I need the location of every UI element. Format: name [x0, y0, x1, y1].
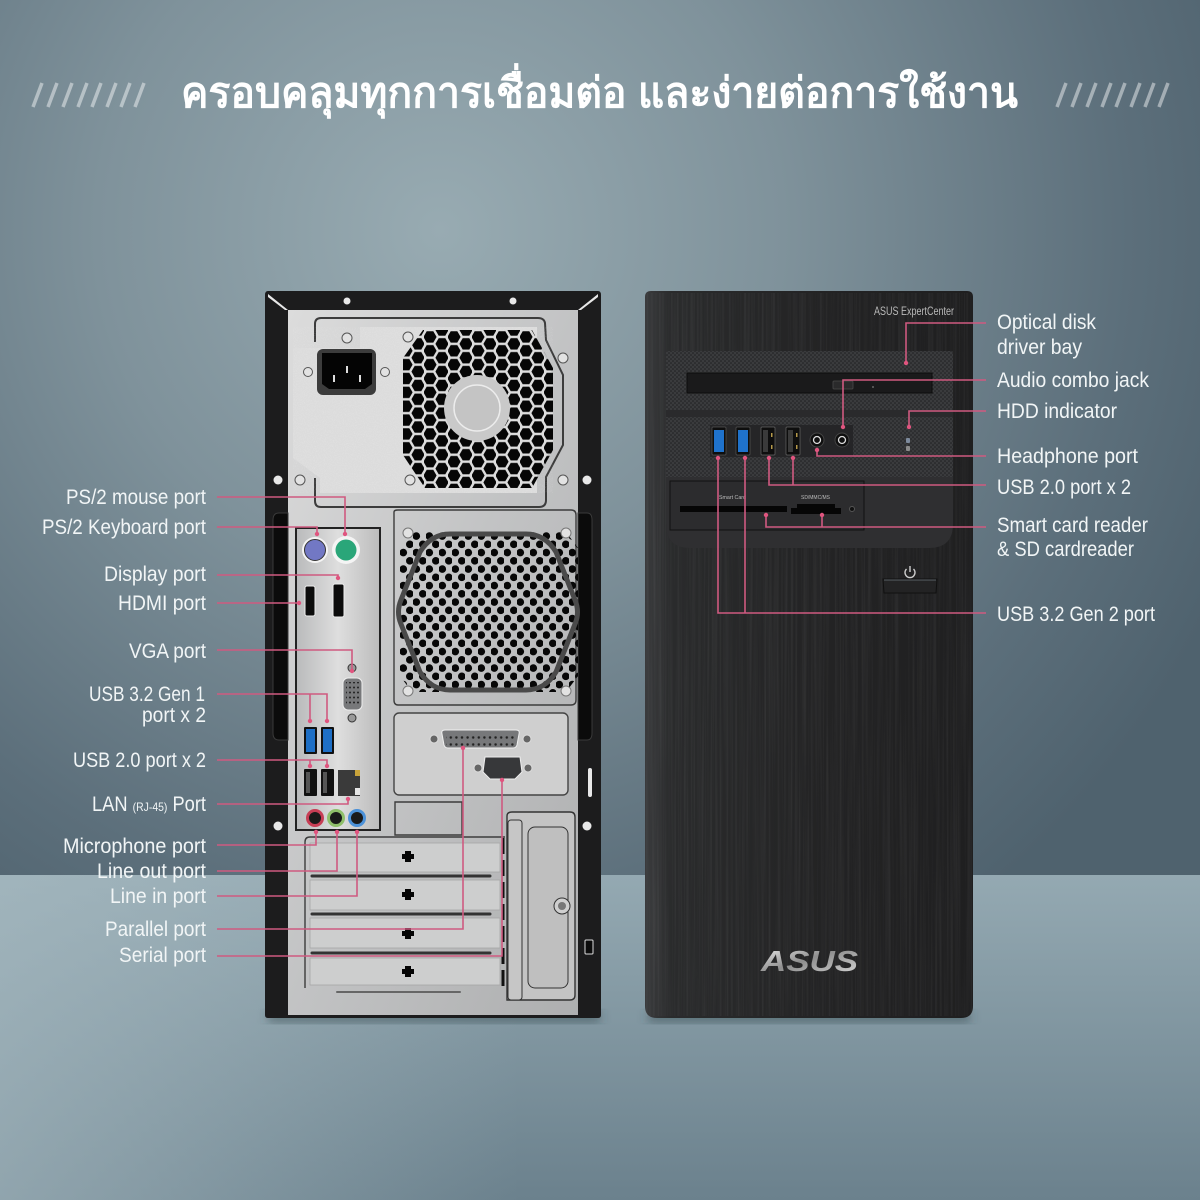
callout: Smart card reader and SD cardreader — [764, 513, 1148, 561]
panel: rear view of tower — [265, 291, 601, 1018]
slot slits — [312, 876, 490, 992]
callout: Serial port — [119, 778, 504, 967]
callout: Line out port: Line out port — [97, 860, 206, 883]
USB 3.2 ports — [304, 727, 334, 754]
tower body — [645, 291, 973, 1018]
IO shield — [296, 528, 380, 830]
callout: Display port: Display port — [104, 563, 206, 586]
audio jacks — [308, 810, 364, 826]
power supply — [293, 318, 568, 507]
PS/2 keyboard connector — [332, 536, 360, 564]
bezel band — [666, 410, 953, 417]
fan grille — [394, 510, 578, 705]
expansion slots — [305, 802, 575, 1000]
callout: Serial port: Serial port — [119, 944, 206, 967]
callout: USB 2.0 port x 2 (front) — [767, 456, 1131, 499]
callout: Audio combo jack: Audio combo jack — [997, 369, 1149, 392]
mesh lower — [666, 417, 953, 477]
psu outline — [315, 318, 563, 507]
optical drive — [687, 373, 932, 393]
callout: PS/2 Keyboard port — [42, 516, 319, 539]
DisplayPort connector — [333, 584, 344, 617]
callout: HDMI port — [118, 592, 301, 615]
callout: USB 3.2 Gen 1 port x 2: USB 3.2 Gen 1 — [89, 683, 205, 706]
callout: PS/2 Keyboard port: PS/2 Keyboard port — [42, 516, 206, 539]
callout: VGA port: VGA port — [129, 640, 206, 663]
card reader — [670, 481, 864, 530]
psu plate grain — [293, 327, 553, 493]
psu screws — [295, 332, 568, 485]
callout: HDD indicator — [907, 400, 1117, 429]
card reader: Smart Card — [719, 495, 746, 501]
retention bracket — [503, 812, 575, 1000]
ASUS logo: ASUS — [760, 946, 859, 978]
callout: Parallel port: Parallel port — [105, 918, 206, 941]
side cut-outs — [273, 513, 592, 740]
callout: LAN port: LAN (RJ-45) Port — [92, 793, 206, 816]
headphone jack — [810, 433, 824, 447]
legacy port panel — [394, 713, 568, 795]
callout: Line in port — [110, 830, 359, 908]
title: ครอบคลุมทุกการเชื่อมต่อ และง่ายต่อการใช้งาน — [181, 63, 1018, 119]
front bezel — [666, 351, 953, 548]
brushed texture — [646, 293, 972, 1016]
callout: Optical disk driver bay — [904, 311, 1096, 365]
callout: Optical disk driver bay: Optical disk — [997, 311, 1096, 334]
callout: Headphone port — [815, 445, 1138, 468]
callout: Microphone port — [63, 830, 318, 858]
front USB 3.2 ports — [712, 427, 750, 455]
callout: Optical disk driver bay: driver bay — [997, 336, 1082, 359]
USB 2.0 ports — [304, 769, 334, 796]
callout: VGA port — [129, 640, 354, 673]
callout: Line out port — [97, 830, 339, 883]
callout: USB 3.2 Gen 1 port x 2: port x 2 — [142, 704, 206, 727]
power socket — [317, 349, 376, 395]
callout: Headphone port: Headphone port — [997, 445, 1138, 468]
parallel connector — [430, 730, 531, 748]
decorative slashes left — [33, 83, 144, 107]
callout: Parallel port — [105, 746, 465, 941]
psu fan hub — [444, 375, 510, 441]
serial connector — [474, 757, 532, 779]
callout: HDMI port: HDMI port — [118, 592, 206, 615]
tower shadows — [268, 1010, 970, 1023]
psu hex vent — [403, 330, 553, 488]
chassis silver plate — [288, 310, 578, 1015]
background floor — [0, 875, 1200, 1200]
callout: Line in port: Line in port — [110, 885, 206, 908]
callout: USB 2.0 port x 2 (rear) — [73, 749, 329, 772]
callout: Smart card reader and SD cardreader: Smart card reader — [997, 514, 1148, 537]
callout: USB 3.2 Gen 2 port — [716, 456, 1155, 626]
chassis black frame — [265, 291, 601, 1018]
callout: LAN port — [92, 793, 350, 816]
callout: USB 3.2 Gen 2 port: USB 3.2 Gen 2 port — [997, 603, 1155, 626]
VGA connector — [343, 664, 362, 722]
LAN port — [338, 770, 360, 796]
brand text: ASUS ExpertCenter — [874, 306, 954, 318]
HDD indicator LEDs — [906, 438, 910, 451]
panel: front view of tower — [645, 291, 973, 1018]
callout: Display port — [104, 563, 340, 586]
background wall — [0, 0, 1200, 875]
HDMI connector — [305, 586, 315, 616]
callout: HDD indicator: HDD indicator — [997, 400, 1117, 423]
mesh upper — [666, 351, 953, 411]
frame details — [268, 294, 598, 954]
callout: PS/2 mouse port: PS/2 mouse port — [66, 486, 206, 509]
card reader: SD/MMC/MS — [801, 495, 831, 501]
callout: Smart card reader and SD cardreader: & SD cardreader — [997, 538, 1134, 561]
callout: Microphone port: Microphone port — [63, 835, 206, 858]
callout: USB 2.0 port x 2 (front): USB 2.0 port x 2 — [997, 476, 1131, 499]
front USB 2.0 ports — [761, 427, 800, 455]
PS/2 mouse connector — [302, 537, 328, 563]
psu inner plate — [293, 327, 553, 493]
cross holes — [402, 851, 414, 977]
callout: Audio combo jack — [841, 369, 1149, 429]
front port panel — [710, 425, 853, 457]
fan guard ring — [398, 534, 578, 690]
microphone jack — [835, 433, 849, 447]
power button — [883, 566, 937, 593]
callout: PS/2 mouse port — [66, 486, 347, 536]
grille holes — [400, 532, 578, 692]
callout: USB 3.2 Gen 1 port x 2 — [89, 683, 329, 727]
decorative slashes right — [1057, 83, 1168, 107]
callout: USB 2.0 port x 2 (rear): USB 2.0 port x 2 — [73, 749, 206, 772]
